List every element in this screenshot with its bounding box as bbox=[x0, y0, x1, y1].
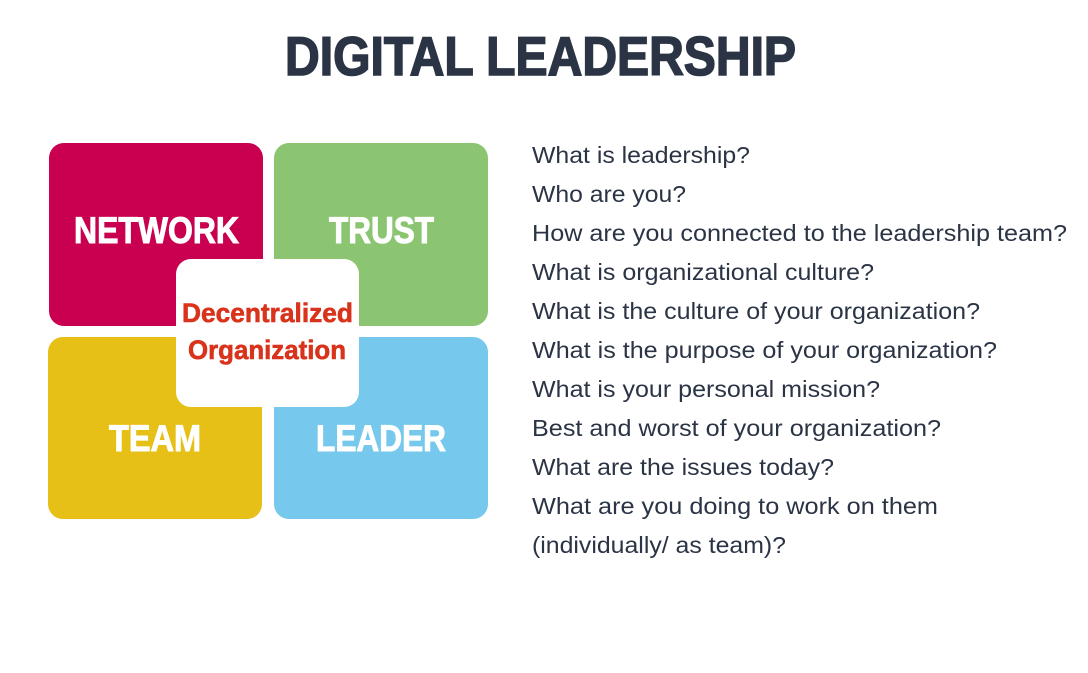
text block: questions list: What is the culture of your organization? bbox=[532, 298, 980, 324]
panel: network: NETWORK bbox=[74, 210, 239, 251]
text block: questions list: What is the purpose of your organization? bbox=[532, 337, 997, 363]
text block: questions list bbox=[532, 142, 1067, 558]
text block: questions list: What is leadership? bbox=[532, 142, 750, 168]
text block: questions list: Best and worst of your organization? bbox=[532, 415, 941, 441]
panel: leader bbox=[274, 337, 488, 519]
text block: questions list: What are you doing to work on them bbox=[532, 493, 938, 519]
panel: trust: TRUST bbox=[329, 210, 434, 251]
panel: network bbox=[49, 143, 263, 326]
text block: questions list: (individually/ as team)? bbox=[532, 532, 786, 558]
panel: team: TEAM bbox=[109, 418, 201, 459]
panel: leader: LEADER bbox=[316, 418, 446, 459]
text block: questions list: Who are you? bbox=[532, 181, 686, 207]
text block: questions list: What are the issues today? bbox=[532, 454, 834, 480]
panel: decentralized organization center bbox=[176, 259, 359, 407]
title: DIGITAL LEADERSHIP bbox=[285, 25, 796, 87]
text block: questions list: How are you connected to the leadership team? bbox=[532, 220, 1067, 246]
text block: questions list: What is organizational culture? bbox=[532, 259, 874, 285]
panel: decentralized organization center: Decentralized bbox=[182, 298, 353, 328]
panel: quadrant diagram bbox=[48, 143, 488, 519]
text block: questions list: What is your personal mission? bbox=[532, 376, 880, 402]
panel: trust bbox=[274, 143, 488, 326]
panel: team bbox=[48, 337, 262, 519]
panel: decentralized organization center: Organization bbox=[188, 335, 346, 365]
